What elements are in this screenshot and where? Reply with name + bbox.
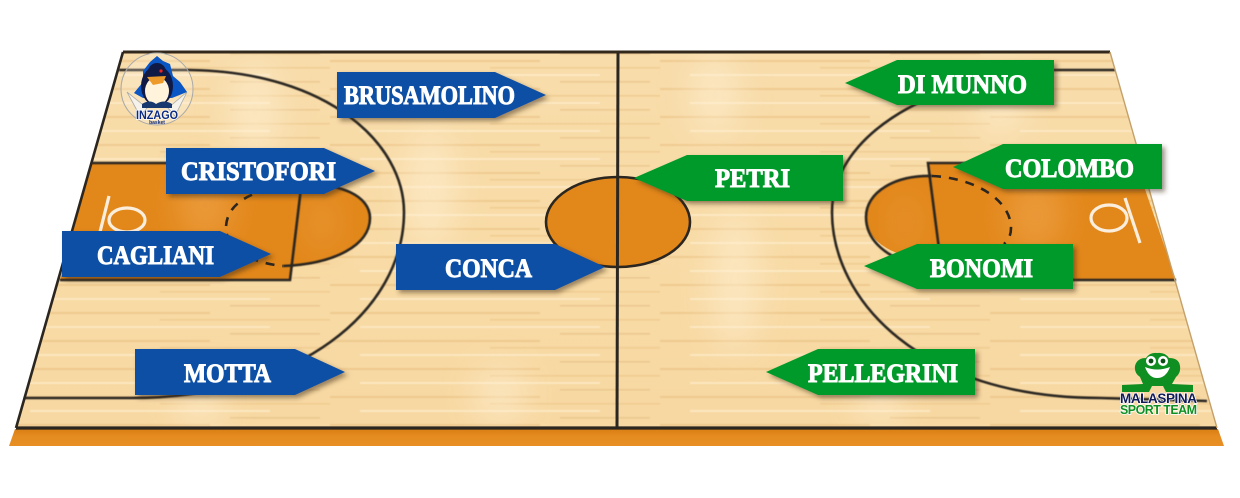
player arrow: Petri: PETRI: [715, 164, 790, 193]
player arrow: Pellegrini: PELLEGRINI: [808, 359, 958, 388]
right key: [866, 163, 1176, 280]
icon: blue flames: [134, 56, 187, 98]
player arrow: Di Munno: [845, 60, 1054, 105]
icon: penguin: [141, 63, 173, 108]
court floor band: [9, 429, 1224, 446]
player arrow: Colombo: [953, 144, 1162, 189]
logo subtitle: basket: [149, 120, 165, 126]
player arrow: Cagliani: CAGLIANI: [97, 241, 214, 270]
right sideline: [1110, 52, 1217, 428]
logo: Malaspina frog: [1120, 353, 1197, 417]
player arrow: Cristofori: CRISTOFORI: [181, 157, 336, 186]
player arrow: Brusamolino: BRUSAMOLINO: [344, 81, 515, 110]
center circle: [546, 177, 690, 267]
left three-point arc: [24, 70, 404, 398]
icon: wings: [127, 92, 187, 116]
left hoop: [100, 196, 145, 232]
player arrow: Brusamolino: [337, 72, 546, 118]
logo name: INZAGO: [136, 108, 178, 122]
icon: frog: [1122, 353, 1193, 392]
wooden floor: [16, 52, 1217, 428]
logo subtitle: SPORT TEAM: [1120, 403, 1197, 417]
court outline: [123, 50, 1110, 54]
player arrow: Bonomi: BONOMI: [930, 254, 1033, 283]
player arrow: Petri: [634, 155, 843, 201]
player arrow: Motta: [135, 349, 345, 395]
left key: [60, 163, 370, 280]
logo name: MALASPINA: [1120, 391, 1197, 406]
player arrow: Colombo: COLOMBO: [1005, 154, 1134, 183]
player arrow: Conca: [396, 244, 605, 290]
left sideline: [16, 52, 123, 428]
floor highlights: [176, 55, 1026, 426]
right hoop: [1091, 198, 1140, 243]
player arrow: Motta: MOTTA: [184, 359, 271, 388]
player arrow: Pellegrini: [766, 349, 975, 395]
half-court line: [617, 52, 618, 428]
floor planks: [16, 52, 1217, 428]
logo: Inzago penguin: [121, 53, 193, 126]
player arrow: Bonomi: [864, 244, 1073, 289]
player arrow: Di Munno: DI MUNNO: [898, 70, 1027, 99]
right three-point arc: [832, 70, 1207, 401]
panel: basketball court: [9, 52, 1224, 446]
team: blue players: [62, 72, 605, 395]
team: green players: [634, 60, 1162, 395]
player arrow: Cagliani: [62, 231, 271, 277]
baseline: [16, 426, 1217, 430]
player arrow: Cristofori: [166, 148, 375, 194]
player arrow: Conca: CONCA: [445, 254, 532, 283]
